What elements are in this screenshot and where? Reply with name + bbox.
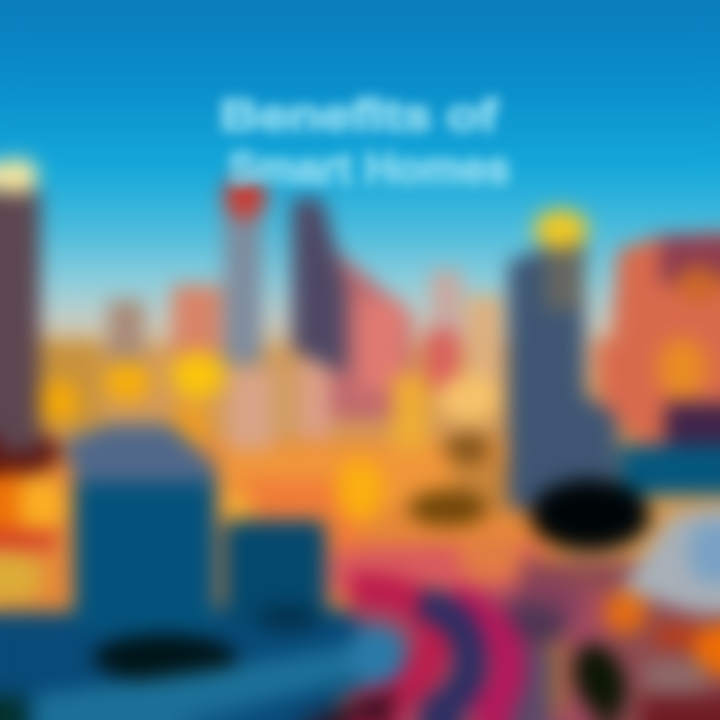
blue building right — [224, 520, 326, 628]
dark spots among midground buildings — [0, 430, 492, 526]
lower right orange and dark foliage — [458, 538, 720, 720]
warm window lights — [0, 351, 502, 602]
dark corners — [0, 690, 400, 720]
lagoon under road — [348, 625, 404, 685]
right slate tower with yellow top — [508, 209, 618, 510]
pink road bands — [350, 590, 508, 718]
title line 2: Smart Homes — [228, 144, 510, 193]
dark plaza shadow — [93, 605, 320, 682]
red-topped tower — [223, 175, 267, 365]
title — [220, 91, 510, 193]
slanted central tower — [292, 198, 428, 450]
teal canopy right — [620, 445, 720, 495]
foreground plaza: dark blue base — [0, 600, 405, 720]
amber and peach building stripes — [40, 270, 507, 510]
right colourful building — [595, 232, 720, 448]
title line 1: Benefits of — [220, 91, 497, 140]
blue-grey roof on building — [62, 424, 212, 482]
blue building left — [74, 462, 216, 632]
left tower with glowing top — [0, 158, 40, 452]
light blue walkway — [35, 636, 405, 720]
pale dome right — [620, 505, 720, 615]
midground warm city fill — [0, 345, 720, 720]
black silhouette tree — [530, 479, 650, 551]
